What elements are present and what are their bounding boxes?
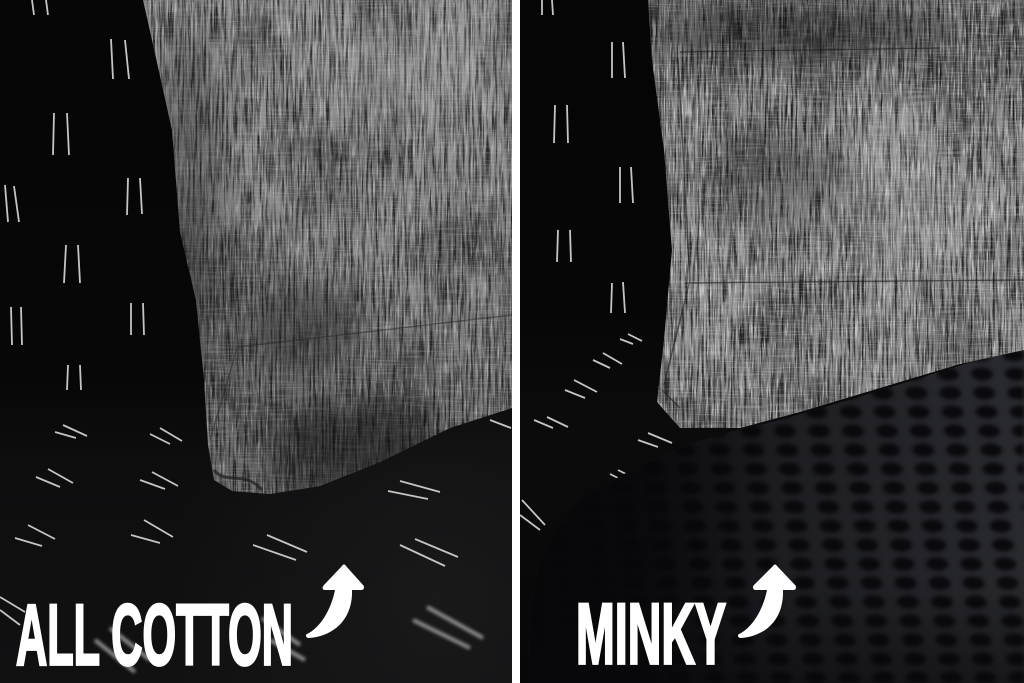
- arrow: minky: [738, 564, 796, 638]
- pillow: cotton: [130, 0, 520, 500]
- backdrop: dark bedding: [0, 0, 512, 683]
- label: minky: MINKY: [576, 586, 726, 682]
- blurred foreground stitch marks: [95, 607, 483, 672]
- backdrop: dark bedding: [520, 0, 1024, 683]
- pillow: cotton on minky: [640, 0, 1024, 440]
- sheet stitch marks: [0, 0, 511, 625]
- panel: all cotton photo: [0, 0, 520, 683]
- minky blanket: [525, 347, 1024, 683]
- panel: minky photo: [520, 0, 1024, 683]
- label: all cotton: ALL COTTON: [16, 588, 293, 683]
- arrow: cotton: [306, 564, 364, 638]
- sheet stitch marks: [520, 0, 672, 530]
